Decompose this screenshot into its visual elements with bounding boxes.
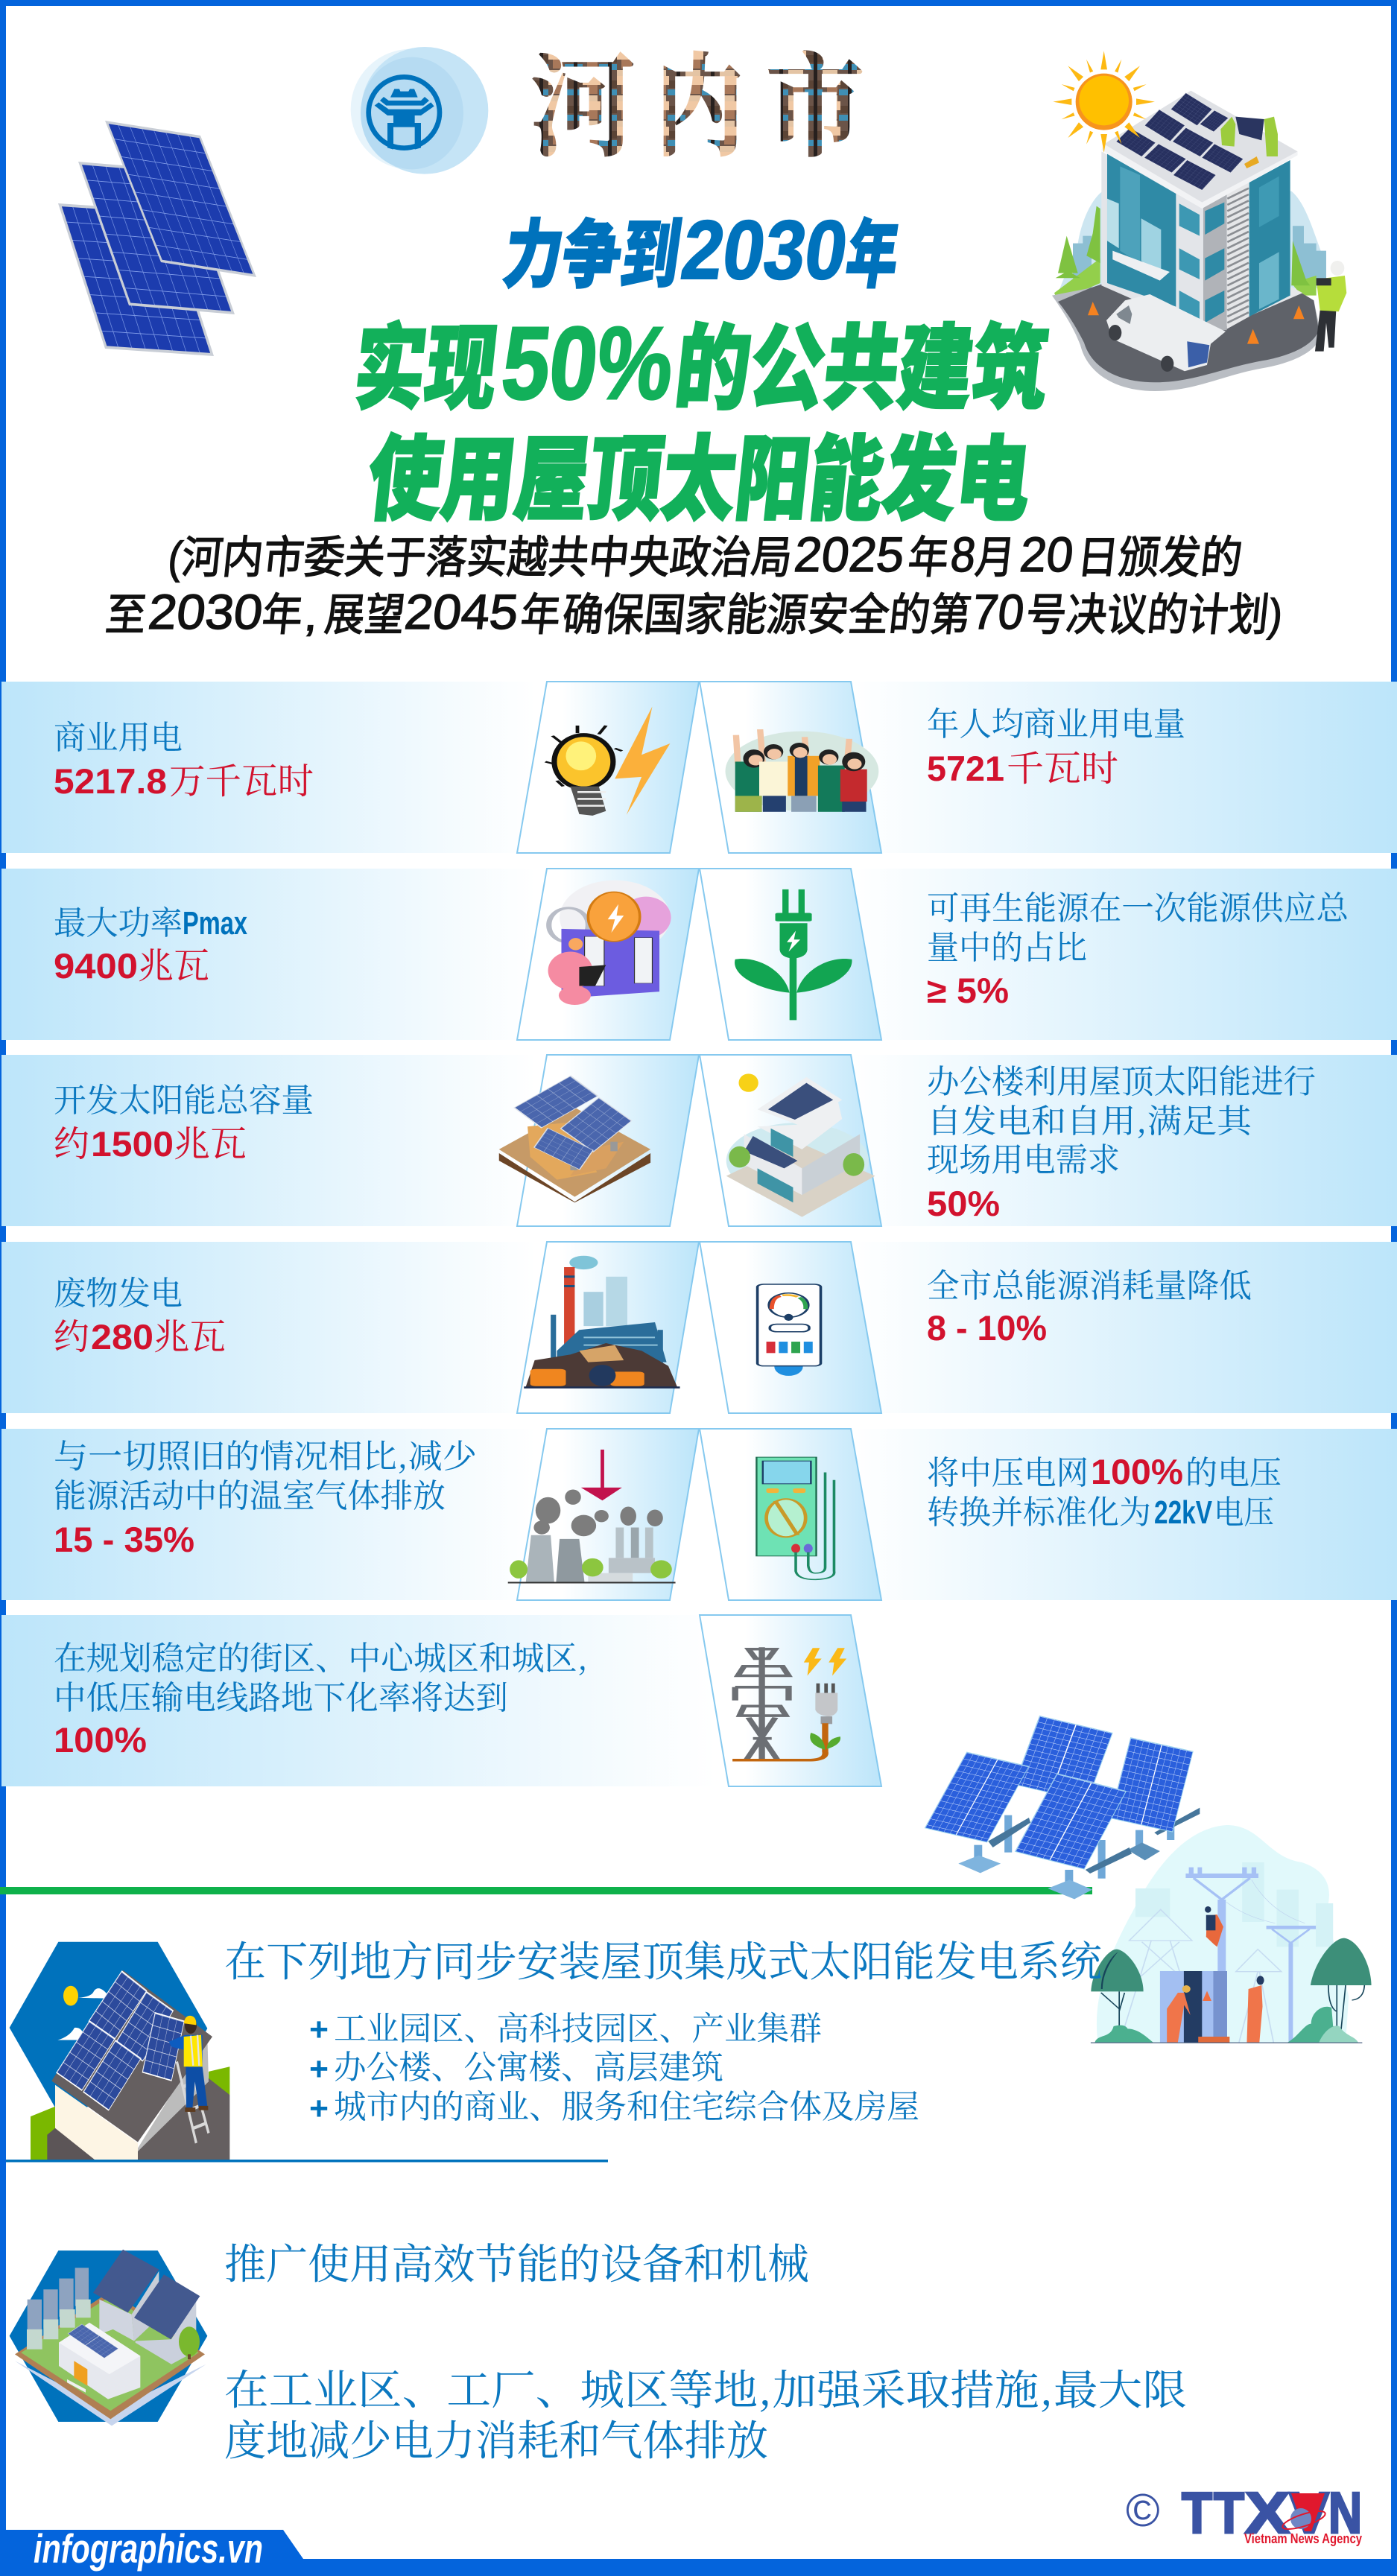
stat: per capita electricity: 年人均商业用电量 [927, 697, 1185, 745]
divider: green bar [0, 1887, 1092, 1894]
logo: TTXVN: Vietnam News Agency [1244, 2531, 1362, 2546]
list: installation sites: 办公楼、公寓楼、高层建筑 [334, 2040, 723, 2088]
subtitle: 年 [260, 590, 305, 640]
icon: plug with green leaves [735, 889, 852, 1020]
stat: office rooftop solar: 自发电和自用,满足其 [927, 1094, 1253, 1142]
heading: use rooftop solar power: 使用屋顶太阳能发电 [363, 428, 1036, 532]
section: efficient equipment [10, 2232, 1187, 2468]
row 4 [1, 1242, 1397, 1413]
illustration: power line workers [1091, 1825, 1372, 2043]
subtitle: 年 [519, 590, 563, 640]
heading: Hanoi city: 河 [530, 17, 635, 178]
subtitle: 2025 [791, 527, 907, 583]
stat: total energy reduction: 全市总能源消耗量降低 [927, 1259, 1252, 1307]
footer: site name: infographics.vn [34, 2525, 263, 2572]
stat: maximum power [54, 896, 247, 989]
subtitle: 2030 [145, 585, 265, 640]
heading: Hanoi city: 内 [656, 17, 744, 178]
stat: greenhouse gas reduction: 与一切照旧的情况相比,减少 [54, 1430, 477, 1477]
heading: rooftop solar: 在下列地方同步安装屋顶集成式太阳能发电系统 [224, 1929, 1102, 1989]
stat: solar capacity: 兆瓦 [174, 1115, 247, 1167]
section: rooftop solar installation [10, 1929, 1102, 2160]
stat: total energy reduction: 8 - 10% [927, 1308, 1047, 1348]
stat: solar capacity: 1500 [91, 1124, 174, 1164]
stat: waste power: 约 [54, 1308, 89, 1360]
stat: waste power: 280 [91, 1317, 153, 1357]
subtitle: 至 [104, 590, 149, 640]
icon: light bulb and lightning [545, 706, 670, 816]
stat: waste power: 废物发电 [54, 1266, 183, 1314]
stat: renewable share [927, 881, 1349, 1010]
stat: greenhouse gas reduction: 15 - 35% [54, 1520, 194, 1559]
list: installation sites [309, 2002, 919, 2128]
heading: by 2030: 2030 [677, 203, 853, 296]
stat: underground lines [54, 1631, 588, 1760]
subtitle [104, 527, 1285, 640]
logo: TTXVN: V [1289, 2480, 1329, 2545]
logo: TTXVN [1126, 2480, 1362, 2546]
heading: 50 percent of public buildings: 的公共建筑 [671, 317, 1053, 421]
heading: 50 percent of public buildings [349, 306, 1053, 421]
icon: energy meter [758, 1284, 821, 1376]
stat: maximum power: 9400 [54, 946, 138, 986]
row 1 [1, 682, 1397, 853]
stat: renewable share: 量中的占比 [927, 921, 1087, 968]
heading: by 2030: 年 [841, 214, 905, 297]
subtitle: 展望 [323, 590, 408, 640]
subtitle: , [302, 590, 321, 640]
stat: commercial electricity: 万千瓦时 [169, 752, 314, 804]
stat: commercial electricity: 5217.8 [54, 761, 167, 801]
icon: Hanoi emblem [351, 47, 488, 174]
icon: house with rooftop panels [726, 1073, 875, 1217]
heading: efficient equipment: 推广使用高效节能的设备和机械 [224, 2232, 809, 2291]
heading: by 2030: 力争到 [498, 214, 686, 297]
logo: TTXVN: T [1214, 2480, 1244, 2545]
logo: TTXVN: X [1245, 2480, 1290, 2545]
illustration: ground-mounted solar panels [925, 1716, 1200, 1899]
subtitle: 8 [948, 527, 978, 583]
stat: solar capacity [54, 1073, 314, 1167]
icon: stacked solar panels [58, 121, 256, 356]
text: reduce consumption and emissions [224, 2358, 1187, 2468]
list: installation sites: 工业园区、高科技园区、产业集群 [334, 2002, 822, 2049]
icon: energy engineer and building [548, 881, 671, 1005]
stat: waste power: 兆瓦 [153, 1308, 226, 1360]
stat: medium voltage grid: 22kV [1154, 1494, 1212, 1531]
divider: blue line [6, 2160, 608, 2162]
stat: commercial electricity: 商业用电 [54, 711, 183, 758]
stat: underground lines: 100% [54, 1720, 147, 1760]
subtitle: 70 [969, 585, 1027, 640]
stat: office rooftop solar: 办公楼利用屋顶太阳能进行 [927, 1055, 1316, 1103]
heading: 50 percent of public buildings: 实现 [349, 317, 502, 421]
heading: by 2030 [498, 203, 905, 297]
stat: renewable share: 可再生能源在一次能源供应总 [927, 881, 1349, 929]
row 5 [1, 1429, 1397, 1600]
text: reduce consumption and emissions: 度地减少电力消耗和气体排放 [224, 2408, 768, 2468]
stat: renewable share: ≥ 5% [927, 971, 1009, 1010]
icon: smokestacks with down arrow [508, 1450, 676, 1584]
stat: maximum power: 兆瓦 [138, 937, 209, 989]
subtitle: 20 [1017, 527, 1076, 583]
heading: Hanoi city [530, 17, 864, 178]
subtitle: 日颁发的 [1075, 533, 1245, 583]
subtitle: 确保国家能源安全的第 [560, 590, 974, 640]
stat: per capita electricity: 千瓦时 [1007, 740, 1118, 791]
heading: Hanoi city: 市 [766, 17, 864, 178]
stat: office rooftop solar: 50% [927, 1184, 1000, 1223]
list: installation sites: + [309, 2051, 329, 2087]
list: installation sites: + [309, 2011, 329, 2048]
stat: office rooftop solar: 现场用电需求 [927, 1133, 1120, 1181]
heading: 50 percent of public buildings: 50% [497, 306, 679, 421]
footer band [0, 2525, 1397, 2576]
subtitle: 2045 [402, 585, 521, 640]
subtitle: (河内市委关于落实越共中央政治局 [166, 533, 795, 583]
stat: underground lines: 在规划稳定的街区、中心城区和城区, [54, 1631, 588, 1679]
logo: TTXVN: © [1126, 2485, 1160, 2537]
row 6 [1, 1615, 881, 1786]
stat: medium voltage grid: 100% [1091, 1452, 1183, 1491]
stat: office rooftop solar [927, 1055, 1316, 1223]
stat: solar capacity: 开发太阳能总容量 [54, 1073, 314, 1121]
list: installation sites: + [309, 2090, 329, 2127]
stat: greenhouse gas reduction: 能源活动中的温室气体排放 [54, 1469, 446, 1517]
icon: multimeter [756, 1457, 834, 1579]
subtitle: 号决议的计划) [1024, 590, 1285, 640]
icon: waste-to-energy plant [524, 1256, 680, 1389]
stat: medium voltage grid: 将中压电网 [927, 1446, 1089, 1494]
stat: solar capacity: 约 [54, 1115, 89, 1167]
icon: pylon with plug [732, 1647, 846, 1760]
row 3 [1, 1055, 1397, 1226]
stat: maximum power: 最大功率 [54, 896, 183, 944]
row 2 [1, 869, 1397, 1040]
stat: per capita electricity [927, 697, 1185, 791]
stat: total energy reduction [927, 1259, 1252, 1348]
stat: waste power [54, 1266, 226, 1360]
subtitle: 月 [973, 533, 1018, 583]
stat: per capita electricity: 5721 [927, 749, 1004, 788]
icon: worker installing rooftop panels [10, 1942, 229, 2160]
stat: commercial electricity [54, 711, 314, 804]
stat: underground lines: 中低压输电线路地下化率将达到 [54, 1671, 508, 1719]
text: reduce consumption and emissions: 在工业区、工厂、城区等地,加强采取措施,最大限 [224, 2358, 1187, 2417]
stat: medium voltage grid: 的电压 [1185, 1446, 1282, 1494]
illustration: office building with rooftop solar [1052, 51, 1346, 391]
subtitle: 年 [906, 533, 951, 583]
list: installation sites: 城市内的商业、服务和住宅综合体及房屋 [334, 2080, 919, 2128]
stat: medium voltage grid: 电压 [1214, 1485, 1274, 1533]
logo: TTXVN: N [1328, 2480, 1362, 2545]
stat: medium voltage grid [927, 1446, 1282, 1533]
stat: greenhouse gas reduction [54, 1430, 477, 1559]
icon: isometric solar campus [10, 2250, 207, 2426]
icon: solar array on earth block [499, 1076, 650, 1202]
icon: group of people [726, 729, 878, 812]
stat: maximum power: Pmax [183, 905, 247, 942]
logo: TTXVN: T [1182, 2480, 1212, 2545]
stat: medium voltage grid: 转换并标准化为 [927, 1485, 1151, 1533]
